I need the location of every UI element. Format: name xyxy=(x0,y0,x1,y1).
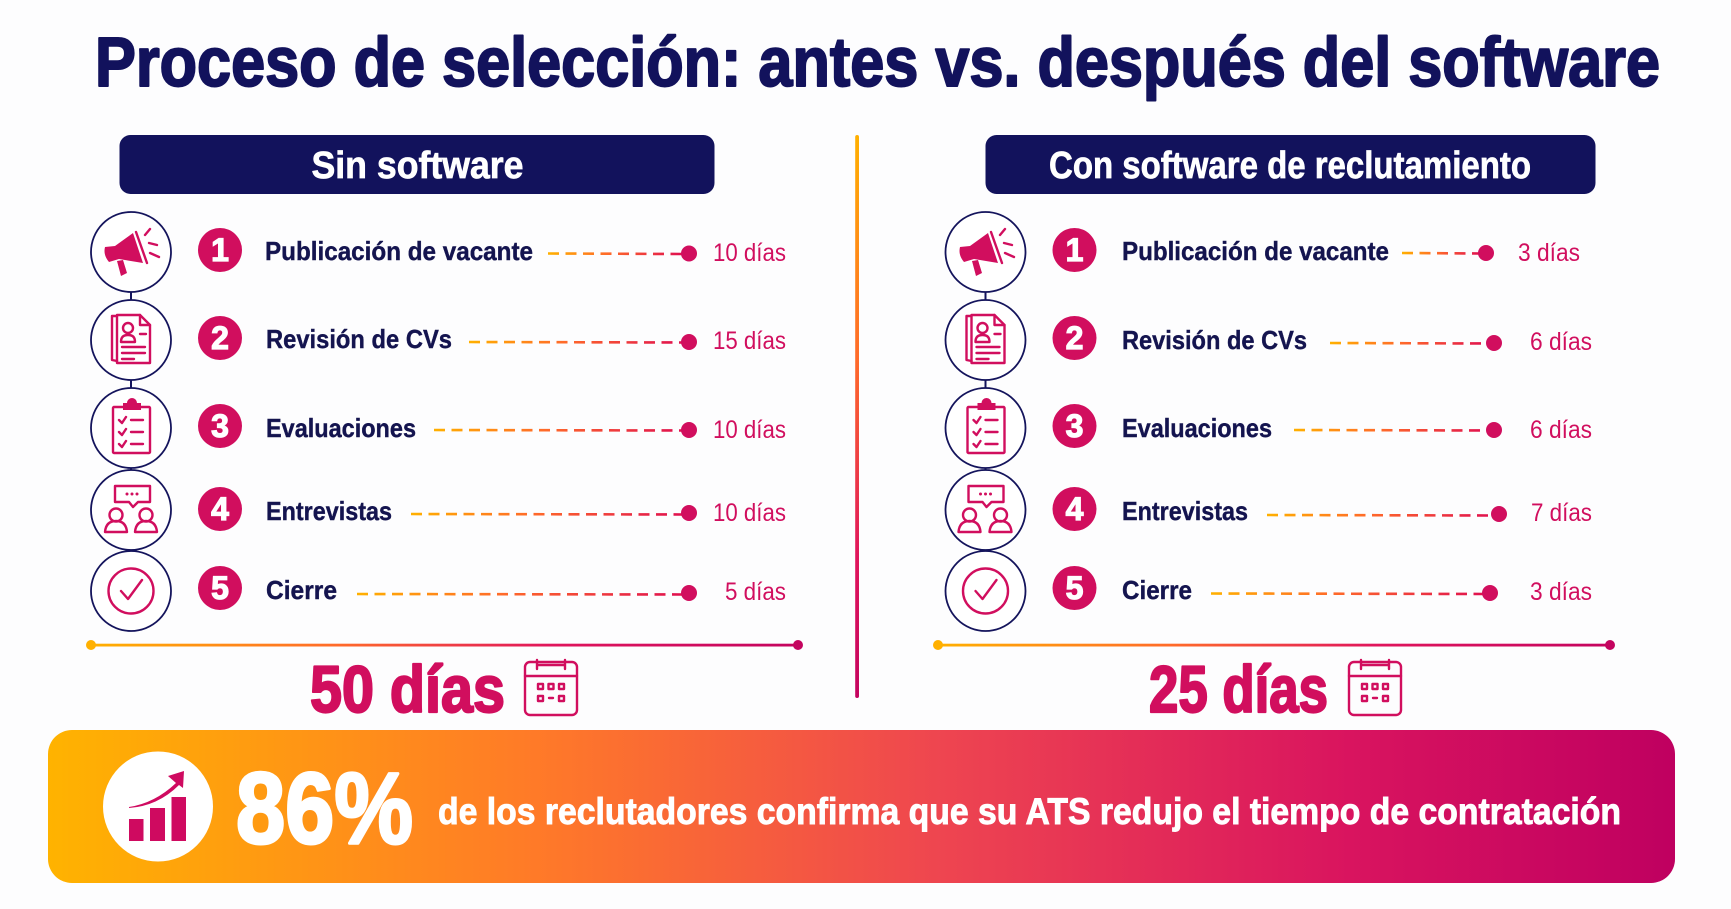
step 5: cierre xyxy=(91,551,786,631)
icon: interview xyxy=(946,470,1026,550)
number badge 4: 4 xyxy=(1066,491,1084,527)
number badge 2 xyxy=(1052,316,1096,360)
number badge 5 xyxy=(198,566,242,610)
total: 25 días: 25 días xyxy=(1149,652,1328,726)
total line xyxy=(86,640,803,650)
step 2: revisión de CVs xyxy=(91,300,786,380)
icon: resume xyxy=(946,300,1026,380)
label: Cierre xyxy=(1122,575,1192,605)
icon: calendar xyxy=(1349,660,1401,715)
step circles connectors xyxy=(984,288,986,558)
icon: check xyxy=(946,551,1026,631)
icon: check xyxy=(91,551,171,631)
statistic number: 86% xyxy=(236,753,413,865)
total line xyxy=(933,640,1615,650)
step 3: evaluaciones xyxy=(946,388,1592,468)
value: 5 días xyxy=(725,578,786,606)
icon: clipboard xyxy=(91,388,171,468)
dashed connector xyxy=(1402,245,1494,261)
number badge 3 xyxy=(198,404,242,448)
label: Evaluaciones xyxy=(1122,413,1272,443)
number badge 5: 5 xyxy=(1066,570,1083,606)
total: 50 días: 50 días xyxy=(310,652,505,726)
number badge 3: 3 xyxy=(1066,408,1083,444)
icon: calendar xyxy=(525,660,577,715)
heading: con software de reclutamiento xyxy=(986,135,1596,194)
icon: growth chart xyxy=(103,752,213,862)
number badge 3 xyxy=(1052,404,1096,448)
label: Revisión de CVs xyxy=(1122,325,1307,355)
icon: clipboard xyxy=(946,388,1026,468)
step 2: revisión de CVs xyxy=(946,300,1592,380)
step 4: entrevistas xyxy=(946,470,1592,550)
dashed connector xyxy=(548,246,697,262)
number badge 4 xyxy=(198,487,242,531)
value: 7 días xyxy=(1531,499,1592,527)
icon: megaphone xyxy=(91,212,171,292)
banner: 86% statistic xyxy=(48,730,1675,883)
number badge 4: 4 xyxy=(211,491,229,527)
center divider xyxy=(855,135,859,698)
step 5: cierre xyxy=(946,551,1592,631)
value: 6 días xyxy=(1530,416,1592,444)
value: 15 días xyxy=(713,327,786,355)
number badge 5 xyxy=(1052,566,1096,610)
value: 3 días xyxy=(1530,578,1592,606)
step 4: entrevistas xyxy=(91,470,786,550)
dashed connector xyxy=(469,334,697,350)
dashed connector xyxy=(434,422,697,438)
statistic description: de los reclutadores confirma que su ATS redujo el tiempo de contratación xyxy=(438,791,1621,832)
number badge 2: 2 xyxy=(211,320,229,356)
dashed connector xyxy=(1211,585,1498,601)
value: 10 días xyxy=(713,239,786,267)
step 1: publicación de vacante xyxy=(91,212,786,292)
heading: sin software xyxy=(120,135,714,194)
label: Entrevistas xyxy=(266,496,392,526)
icon: megaphone xyxy=(946,212,1026,292)
dashed connector xyxy=(357,585,697,601)
label: Entrevistas xyxy=(1122,496,1248,526)
icon: resume xyxy=(91,300,171,380)
dashed connector xyxy=(1267,506,1507,522)
value: 10 días xyxy=(713,499,786,527)
number badge 2 xyxy=(198,316,242,360)
panel: con software xyxy=(933,135,1615,726)
label: Revisión de CVs xyxy=(266,324,452,354)
heading: con software de reclutamiento: Con software de reclutamiento xyxy=(1049,145,1531,187)
dashed connector xyxy=(1294,422,1502,438)
heading: sin software: Sin software xyxy=(312,145,524,187)
step 1: publicación de vacante xyxy=(946,212,1580,292)
number badge 1: 1 xyxy=(211,232,229,268)
step circles connectors xyxy=(130,288,132,558)
icon: interview xyxy=(91,470,171,550)
value: 10 días xyxy=(713,416,786,444)
number badge 3: 3 xyxy=(211,408,229,444)
number badge 4 xyxy=(1052,487,1096,531)
label: Cierre xyxy=(266,575,337,605)
step 3: evaluaciones xyxy=(91,388,786,468)
number badge 1 xyxy=(198,228,242,272)
label: Evaluaciones xyxy=(266,413,416,443)
label: Publicación de vacante xyxy=(265,236,533,266)
dashed connector xyxy=(1330,335,1502,351)
number badge 5: 5 xyxy=(211,570,229,606)
number badge 2: 2 xyxy=(1066,320,1083,356)
value: 6 días xyxy=(1530,328,1592,356)
label: Publicación de vacante xyxy=(1122,236,1389,266)
number badge 1 xyxy=(1052,228,1096,272)
value: 3 días xyxy=(1518,239,1580,267)
dashed connector xyxy=(411,505,697,521)
number badge 1: 1 xyxy=(1066,232,1083,268)
panel: sin software xyxy=(86,135,803,726)
